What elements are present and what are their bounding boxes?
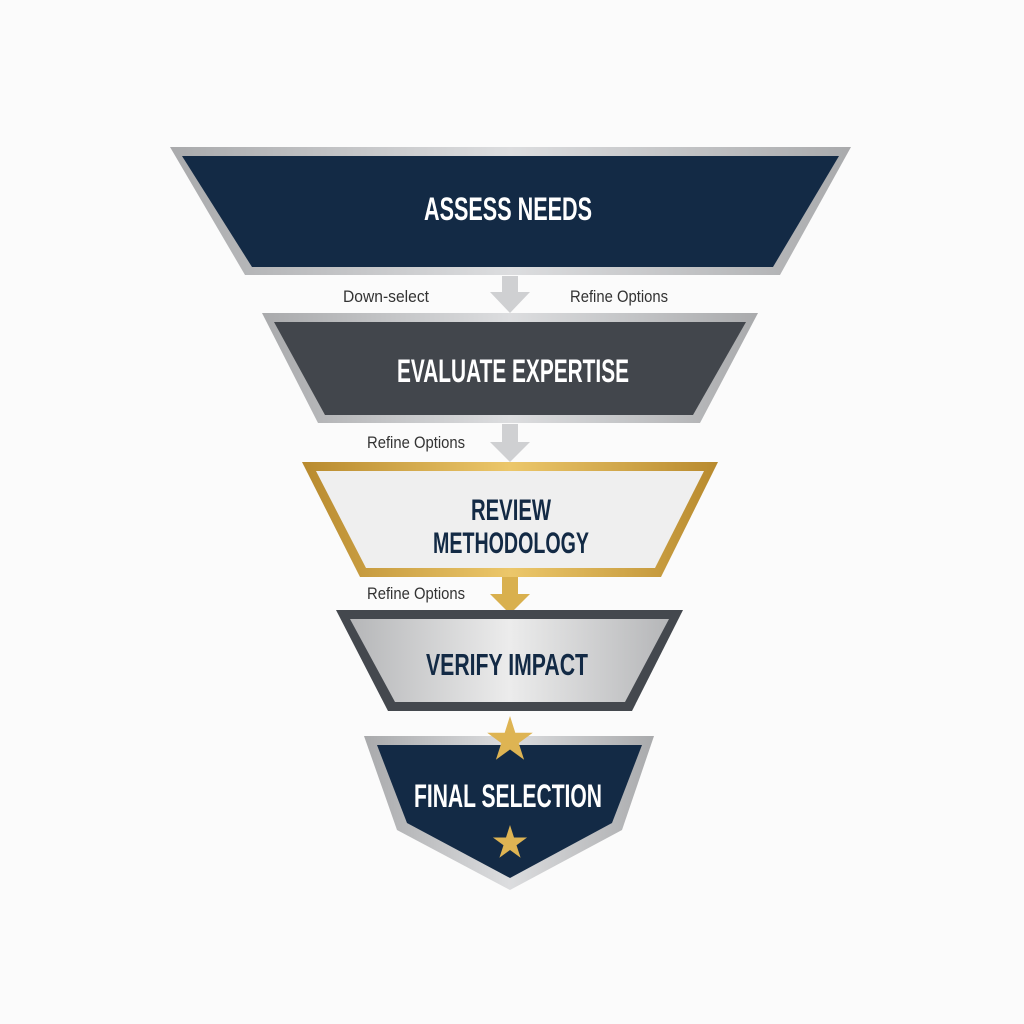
label: refine options 3: Refine Options xyxy=(367,584,465,603)
icon: top star xyxy=(487,716,533,760)
tier: evaluate expertise xyxy=(262,313,758,423)
tier: final selection xyxy=(364,716,654,890)
icon: bottom star xyxy=(493,825,527,858)
label: refine options 2: Refine Options xyxy=(367,433,465,452)
tier: review methodology: METHODOLOGY xyxy=(433,527,589,560)
tier: review methodology xyxy=(302,462,718,577)
label: down-select: Down-select xyxy=(343,287,429,306)
label: refine options 1: Refine Options xyxy=(570,287,668,306)
arrow 2 xyxy=(490,424,530,462)
tier: assess needs xyxy=(170,147,851,275)
arrow 3 gold xyxy=(490,577,530,614)
tier: verify impact xyxy=(336,610,683,711)
tier: assess needs: ASSESS NEEDS xyxy=(424,191,592,227)
arrow 1 xyxy=(490,276,530,313)
tier: final selection: FINAL SELECTION xyxy=(414,778,602,814)
tier: review methodology: REVIEW xyxy=(471,494,551,527)
tier: verify impact: VERIFY IMPACT xyxy=(426,647,588,682)
tier: evaluate expertise: EVALUATE EXPERTISE xyxy=(397,353,629,389)
